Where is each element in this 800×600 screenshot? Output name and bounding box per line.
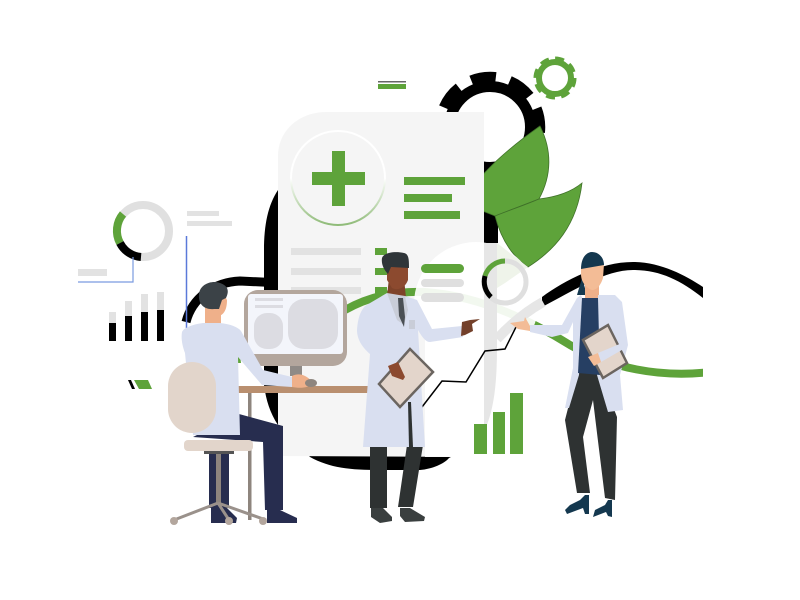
seated man coat — [182, 323, 292, 435]
center doctor head — [387, 262, 408, 289]
right doctor hair — [581, 252, 604, 269]
black blob behind paper — [264, 163, 498, 470]
seated man hair — [199, 282, 228, 309]
right doctor sleeve — [598, 343, 627, 362]
right doctor clipboard hand — [588, 353, 601, 366]
desk — [236, 386, 368, 520]
center doctor pointing hand — [461, 319, 480, 336]
seated man head — [206, 290, 227, 316]
left donut chart — [117, 205, 169, 257]
green bar chart — [474, 393, 523, 454]
mouse — [305, 379, 317, 387]
right doctor — [510, 252, 628, 517]
center doctor hand on clipboard — [388, 362, 405, 380]
line chart — [422, 327, 516, 407]
icon: black gear — [440, 77, 540, 177]
green wave — [345, 292, 710, 374]
left black wave — [186, 281, 282, 322]
grey text lines — [291, 248, 361, 294]
black right wave — [542, 262, 703, 307]
green text lines — [404, 177, 465, 219]
center doctor shoes — [371, 508, 425, 523]
leaves — [480, 126, 582, 267]
top dash — [378, 81, 406, 89]
seated man shoes — [211, 507, 297, 523]
seated man hand — [292, 374, 313, 388]
center doctor hair — [382, 252, 409, 274]
seated man legs — [193, 414, 283, 510]
lens handle diagonal — [497, 302, 543, 339]
plus emblem — [291, 131, 385, 225]
office chair — [168, 362, 267, 525]
right doctor hand — [510, 317, 530, 331]
illustration: medical team — [78, 56, 703, 525]
seated man — [182, 282, 313, 523]
seated man lower leg — [209, 450, 229, 508]
center doctor — [357, 252, 480, 523]
green wave fragment behind seated man — [236, 355, 241, 363]
small green marks — [375, 248, 387, 294]
right doctor ponytail — [577, 278, 587, 295]
black and grey bar chart — [109, 292, 164, 341]
center doctor coat split — [408, 402, 413, 447]
right doctor pants — [565, 373, 617, 500]
right doctor coat left side — [530, 295, 583, 408]
center doctor tie — [398, 298, 405, 327]
lens and lower paper fade — [414, 242, 538, 457]
monitor — [244, 290, 347, 376]
center doctor neck — [387, 278, 406, 304]
right doctor neck — [585, 282, 599, 298]
blue leader lines — [78, 236, 186, 328]
lens donut — [484, 261, 526, 303]
small flag mark — [128, 380, 152, 389]
center doctor legs — [370, 445, 423, 508]
center doctor clipboard — [379, 349, 433, 407]
document paper — [278, 112, 484, 457]
right doctor top — [578, 298, 600, 375]
seated man neck — [205, 305, 221, 325]
center doctor shirt — [387, 293, 408, 325]
lens handle — [484, 243, 497, 432]
lens leaf tint — [497, 243, 528, 288]
icon: green gear — [536, 58, 574, 98]
right doctor shoes — [565, 495, 612, 517]
center doctor coat — [357, 293, 463, 447]
center doctor pocket — [409, 320, 415, 329]
right doctor coat right side — [597, 295, 628, 412]
right doctor clipboard — [583, 325, 627, 378]
right doctor face — [581, 264, 604, 290]
grey labels near donut — [78, 211, 232, 276]
lens pills — [421, 264, 464, 302]
